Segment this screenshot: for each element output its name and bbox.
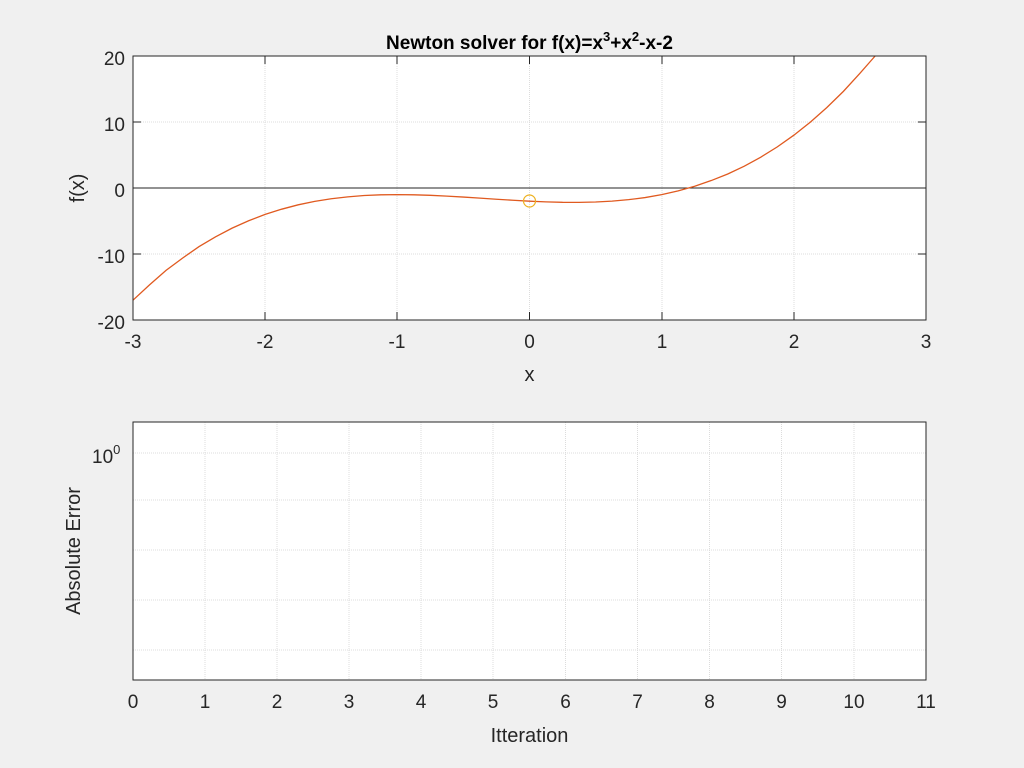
title: 3 — [603, 29, 610, 44]
top x tick labels: -2 — [257, 332, 273, 353]
top x tick labels: 2 — [789, 332, 799, 353]
bottom x tick labels: 6 — [560, 692, 571, 713]
top x tick labels: 0 — [524, 332, 535, 353]
zero line — [133, 187, 926, 189]
bottom x tick labels: 11 — [916, 692, 936, 713]
top y tick labels — [98, 49, 125, 334]
panel: bottom axes — [92, 422, 936, 713]
bottom x tick labels: 8 — [704, 692, 715, 713]
x label bottom: Itteration — [491, 725, 568, 747]
marker: initial guess — [524, 195, 536, 207]
top x tick labels — [125, 332, 931, 353]
bottom x tick labels: 2 — [272, 692, 282, 713]
bottom y tick label: 0 — [113, 442, 120, 457]
curve f(x) — [133, 56, 875, 300]
bottom x tick labels: 9 — [776, 692, 787, 713]
top y tick labels: 20 — [104, 49, 125, 70]
bottom x tick labels — [128, 692, 936, 713]
y label bottom: Absolute Error — [63, 487, 85, 615]
title: -x-2 — [639, 33, 673, 54]
top y tick labels: 0 — [114, 181, 125, 202]
top y tick labels: 10 — [104, 115, 125, 136]
y label top: f(x) — [67, 174, 89, 202]
bottom x tick labels: 1 — [200, 692, 210, 713]
title: 2 — [632, 29, 639, 44]
title: Newton solver for f(x)=x — [386, 33, 603, 54]
x label top: x — [524, 364, 534, 386]
bottom y tick label: 10 — [92, 447, 113, 468]
top x tick labels: 3 — [921, 332, 931, 353]
panel: top axes — [98, 49, 931, 353]
top x tick labels: -3 — [125, 332, 141, 353]
bottom x tick labels: 4 — [416, 692, 427, 713]
title: +x — [610, 33, 632, 54]
top y tick labels: -20 — [98, 313, 125, 334]
bottom x tick labels: 3 — [344, 692, 354, 713]
top x tick labels: 1 — [657, 332, 667, 353]
bottom x tick labels: 7 — [632, 692, 643, 713]
bottom x tick labels: 10 — [843, 692, 865, 713]
bottom x tick labels: 5 — [488, 692, 498, 713]
top x tick labels: -1 — [389, 332, 405, 353]
bottom x tick labels: 0 — [128, 692, 138, 713]
top y tick labels: -10 — [98, 247, 125, 268]
